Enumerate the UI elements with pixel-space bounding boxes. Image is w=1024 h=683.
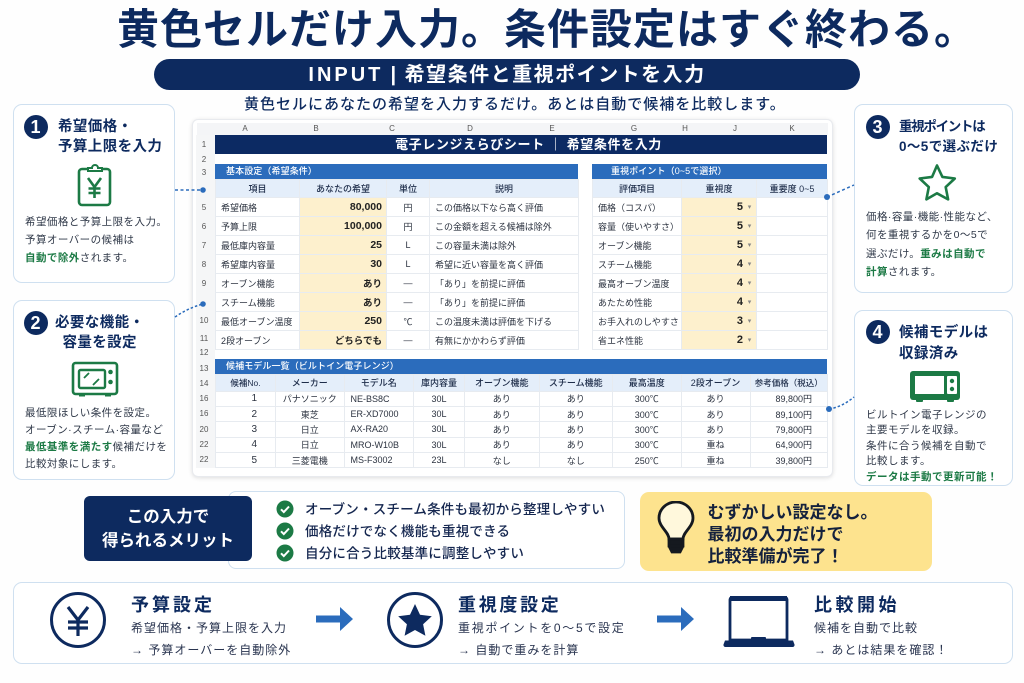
row numbers: 5 xyxy=(202,203,206,212)
row numbers: 22 xyxy=(200,440,208,449)
check list xyxy=(276,500,605,562)
table: priority points: 5 xyxy=(737,239,743,251)
table: priority points: 最高オーブン温度 xyxy=(598,278,669,288)
column letters: G xyxy=(631,124,637,133)
step 3 heading: 0〜5で選ぶだけ xyxy=(899,138,998,154)
panel: step 2 xyxy=(13,300,175,480)
step 3 heading: 重視ポイントは xyxy=(899,118,984,134)
step 1 heading xyxy=(58,118,162,154)
table: candidate models: なし xyxy=(493,456,511,466)
panel: merit list xyxy=(228,491,625,569)
flow 2 heading: 重視度設定 xyxy=(458,595,562,615)
table: basic settings: この容量未満は除外 xyxy=(435,240,516,250)
table: candidate models: 日立 xyxy=(301,440,319,450)
badge 1 xyxy=(24,114,48,138)
table: candidate models: 89,100円 xyxy=(775,410,812,420)
table: candidate models: 三菱電機 xyxy=(292,456,328,466)
table: basic settings: あなたの希望 xyxy=(316,184,370,194)
badge 2 xyxy=(24,310,48,334)
sheet title bar xyxy=(215,135,827,154)
flow 1 text: → 予算オーバーを自動除外 xyxy=(131,642,291,656)
panel: merit heading: この入力で xyxy=(127,508,209,526)
table: priority points: オーブン機能 xyxy=(598,240,651,250)
panel: step 1 xyxy=(13,104,175,283)
column letters xyxy=(197,123,828,135)
row numbers: 13 xyxy=(200,364,208,373)
step 2 text: 最低限ほしい条件を設定。 xyxy=(25,407,156,419)
callout text xyxy=(708,503,878,566)
table: priority points: ▾ xyxy=(748,261,751,268)
row numbers: 6 xyxy=(202,222,206,231)
table: basic settings: L xyxy=(405,240,410,250)
flow 1 heading: 予算設定 xyxy=(131,595,215,615)
table: basic settings: 希望庫内容量 xyxy=(221,260,275,270)
table: priority points: ▾ xyxy=(748,204,751,211)
row numbers: 8 xyxy=(202,260,206,269)
table: candidate models: 30L xyxy=(431,394,447,404)
panel: callout xyxy=(640,492,932,571)
column letters: A xyxy=(242,124,248,133)
table: priority points: 5 xyxy=(737,201,743,213)
table: candidate models: 候補No. xyxy=(230,378,261,388)
icon: microwave filled xyxy=(910,371,960,402)
table: candidate models: 300℃ xyxy=(635,394,659,404)
title: 黄色セルだけ入力。条件設定はすぐ終わる。 xyxy=(117,6,977,53)
table: candidate models: 300℃ xyxy=(635,440,659,450)
step 1 text xyxy=(25,216,167,264)
table: candidate models: MRO-W10B xyxy=(350,440,399,450)
table: priority points: 4 xyxy=(737,258,743,270)
table: candidate models: 30L xyxy=(431,424,447,434)
icon: laptop xyxy=(723,596,795,647)
badge 3: 3 xyxy=(872,116,882,136)
row numbers: 14 xyxy=(200,379,208,388)
table: candidate models: 300℃ xyxy=(635,425,659,435)
table: candidate models: あり xyxy=(493,440,511,450)
table: priority points: 5 xyxy=(737,220,743,232)
table: candidate models: 3 xyxy=(251,424,257,435)
table: priority points: ▾ xyxy=(748,223,751,230)
table: priority points: 2 xyxy=(737,334,743,346)
table: candidate models: 300℃ xyxy=(635,410,659,420)
table: priority points: 4 xyxy=(737,296,743,308)
row numbers: 3 xyxy=(202,168,206,177)
table: candidate models: 4 xyxy=(251,439,257,450)
merit text: オーブン・スチーム条件も最初から整理しやすい xyxy=(305,502,605,517)
table: candidate models: あり xyxy=(567,425,585,435)
column letters: J xyxy=(733,124,737,133)
table: basic settings: ℃ xyxy=(403,316,412,326)
step 4 heading: 候補モデルは xyxy=(899,324,988,340)
subtitle: 黄色セルにあなたの希望を入力するだけ。あとは自動で候補を比較します。 xyxy=(244,96,786,113)
flow 1 text xyxy=(131,621,291,656)
badge 3 xyxy=(866,114,890,138)
table: candidate models: 2段オーブン xyxy=(691,378,740,388)
table: priority points: ▾ xyxy=(748,242,751,249)
column letters: D xyxy=(467,124,473,133)
table: priority points: 3 xyxy=(737,315,743,327)
table: priority points: 価格（コスパ） xyxy=(598,202,661,212)
table: candidate models: 5 xyxy=(251,455,257,466)
table: candidate models: 重ね xyxy=(706,440,724,450)
table: candidate models: 参考価格（税込） xyxy=(755,378,823,388)
table: basic settings: 説明 xyxy=(495,184,513,194)
row numbers: 2 xyxy=(202,155,206,164)
step 3 text xyxy=(866,211,998,278)
callout text: 比較準備が完了！ xyxy=(708,547,844,566)
step 1 heading: 希望価格・ xyxy=(58,118,132,134)
row numbers: 16 xyxy=(200,409,208,418)
table: candidate models: 最高温度 xyxy=(629,378,665,388)
table: candidate models: 23L xyxy=(431,455,447,465)
callout text: 最初の入力だけで xyxy=(708,525,844,544)
table: basic settings: 最低オーブン温度 xyxy=(221,316,292,326)
panel: step 3 xyxy=(854,104,1013,293)
table: basic settings: オーブン機能 xyxy=(221,278,274,288)
table: basic settings: 80,000 xyxy=(350,201,382,213)
table: candidate models: あり xyxy=(706,410,724,420)
table: basic settings: 最低庫内容量 xyxy=(221,240,275,250)
flow 2 text: → 自動で重みを計算 xyxy=(458,642,579,656)
table: candidate models: 30L xyxy=(431,409,447,419)
table: priority points: 重視度 xyxy=(705,184,732,194)
table: candidate models: あり xyxy=(493,425,511,435)
step 3 text: 計算されます。 xyxy=(866,266,942,278)
table: candidate models: スチーム機能 xyxy=(549,378,603,388)
section bar: basic settings xyxy=(215,164,578,179)
step 4 text: 条件に合う候補を自動で xyxy=(866,440,987,452)
table: basic settings: 希望に近い容量を高く評価 xyxy=(435,260,543,270)
table: priority points: あたため性能 xyxy=(598,298,652,308)
merit text: 自分に合う比較基準に調整しやすい xyxy=(305,546,524,561)
table: candidate models: あり xyxy=(567,410,585,420)
step 1 heading: 予算上限を入力 xyxy=(58,138,162,154)
badge 2: 2 xyxy=(30,312,40,332)
step 2 heading xyxy=(55,314,144,350)
table: priority points: ▾ xyxy=(748,299,751,306)
panel: flow steps xyxy=(13,582,1013,664)
table: candidate models: あり xyxy=(493,410,511,420)
table: candidate models: 64,900円 xyxy=(775,440,812,450)
table: candidate models: 250℃ xyxy=(635,456,659,466)
table: candidate models: メーカー xyxy=(292,378,328,388)
table: basic settings: あり xyxy=(363,279,382,290)
row numbers: 22 xyxy=(200,455,208,464)
table: priority points: お手入れのしやすさ xyxy=(598,316,679,326)
table: candidate models: オーブン機能 xyxy=(475,378,528,388)
table: priority points: ▾ xyxy=(748,318,751,325)
step 4 heading xyxy=(899,324,988,362)
icon: check 3 xyxy=(276,544,294,562)
table: candidate models: 89,800円 xyxy=(775,394,812,404)
step 2 text xyxy=(25,407,167,470)
table: candidate models: パナソニック xyxy=(283,394,337,404)
merit text xyxy=(305,502,605,561)
table: basic settings: どちらでも xyxy=(335,336,382,347)
step 2 text: オーブン·スチーム·容量など xyxy=(25,424,163,436)
row numbers: 9 xyxy=(202,279,206,288)
section bar: basic settings: 基本設定（希望条件） xyxy=(226,166,317,176)
table: basic settings: L xyxy=(405,259,410,269)
table: candidate models: 重ね xyxy=(706,456,724,466)
row numbers: 11 xyxy=(200,334,208,343)
table: candidate models: 日立 xyxy=(301,425,319,435)
panel: step 4 xyxy=(854,310,1013,486)
table: candidate models: AX-RA20 xyxy=(350,424,388,434)
flow 1 text: 希望価格・予算上限を入力 xyxy=(131,621,287,635)
table: priority points: 省エネ性能 xyxy=(598,336,643,346)
section bar: candidate models xyxy=(215,359,827,374)
table: candidate models: あり xyxy=(706,425,724,435)
icon: yen clipboard xyxy=(78,164,112,206)
badge 1: 1 xyxy=(30,116,40,136)
panel: merit heading: 得られるメリット xyxy=(102,532,234,550)
panel: spreadsheet xyxy=(192,119,833,477)
table: candidate models: 30L xyxy=(431,440,447,450)
step 3 heading xyxy=(899,118,998,154)
column letters: H xyxy=(682,124,688,133)
table: priority points xyxy=(592,179,828,350)
step 1 text: 予算オーバーの候補は xyxy=(25,234,134,246)
table: priority points: 重要度 0~5 xyxy=(770,184,814,194)
table: candidate models: MS-F3002 xyxy=(350,455,393,465)
merit text: 価格だけでなく機能も重視できる xyxy=(305,524,510,539)
banner: INPUT: INPUT | 希望条件と重視ポイントを入力 xyxy=(308,64,706,86)
icon: yen circle xyxy=(50,592,106,648)
icon: star outline xyxy=(918,164,956,201)
table: candidate models xyxy=(215,374,828,468)
table: basic settings: 円 xyxy=(403,222,412,232)
table: basic settings: 30 xyxy=(370,258,382,270)
table: candidate models: ER-XD7000 xyxy=(350,409,399,419)
step 2 text: 最低基準を満たす候補だけを xyxy=(25,441,167,453)
badge 4: 4 xyxy=(872,322,882,342)
table: candidate models: 2 xyxy=(251,409,257,420)
flow 2 text: 重視ポイントを0〜5で設定 xyxy=(458,621,625,635)
row numbers: 1 xyxy=(202,140,206,149)
table: candidate models: なし xyxy=(567,456,585,466)
table: candidate models: 1 xyxy=(251,393,257,404)
table: priority points: 4 xyxy=(737,277,743,289)
table: basic settings: 250 xyxy=(364,315,382,327)
sheet title bar: 電子レンジえらびシート ｜ 希望条件を入力 xyxy=(395,137,662,152)
table: priority points: スチーム機能 xyxy=(598,260,652,270)
table: candidate models: 79,800円 xyxy=(775,425,812,435)
table: basic settings: 円 xyxy=(403,202,412,212)
badge 4 xyxy=(866,320,890,344)
icon: light bulb xyxy=(658,501,694,554)
table: basic settings: — xyxy=(404,297,412,307)
flow 3 text xyxy=(814,621,948,656)
table: basic settings: この温度未満は評価を下げる xyxy=(435,316,552,326)
table: candidate models: 東芝 xyxy=(301,410,319,420)
table: basic settings: あり xyxy=(363,298,382,309)
column letters: K xyxy=(789,124,795,133)
table: basic settings: スチーム機能 xyxy=(221,298,275,308)
step 4 text: データは手動で更新可能！ xyxy=(866,471,998,483)
step 2 heading: 必要な機能・ xyxy=(55,314,144,330)
table: basic settings: 2段オーブン xyxy=(221,336,270,346)
banner: INPUT xyxy=(154,59,860,90)
section bar: candidate models: 候補モデル一覧（ビルトイン電子レンジ） xyxy=(226,361,399,371)
callout text: むずかしい設定なし。 xyxy=(708,503,878,522)
table: basic settings: 「あり」を前提に評価 xyxy=(435,278,525,288)
step 2 text: 比較対象にします。 xyxy=(25,458,122,470)
table: candidate models: モデル名 xyxy=(361,378,397,388)
step 3 text: 選ぶだけ。重みは自動で xyxy=(866,248,986,260)
flow 3 text: → あとは結果を確認！ xyxy=(814,642,948,656)
table: basic settings: この価格以下なら高く評価 xyxy=(435,202,543,212)
table: basic settings: 希望価格 xyxy=(221,202,257,212)
table: basic settings: 100,000 xyxy=(344,220,382,232)
step 4 text: 比較します。 xyxy=(866,455,931,467)
step 1 text: 希望価格と予算上限を入力。 xyxy=(25,216,167,228)
column letters: C xyxy=(389,124,395,133)
icon: microwave outline xyxy=(72,362,118,396)
table: basic settings: 有無にかかわらず評価 xyxy=(435,336,525,346)
table: priority points: 評価項目 xyxy=(619,184,655,194)
table: basic settings: 項目 xyxy=(248,184,266,194)
column letters: B xyxy=(313,124,319,133)
step 4 text: 主要モデルを収録。 xyxy=(866,424,965,436)
table: basic settings: — xyxy=(404,278,412,288)
row numbers xyxy=(196,135,215,468)
step 4 text xyxy=(866,408,998,483)
table: candidate models: 39,800円 xyxy=(775,456,812,466)
table: basic settings: 予算上限 xyxy=(221,222,257,232)
step 2 heading: 容量を設定 xyxy=(62,334,137,350)
icon: check 2 xyxy=(276,522,294,540)
row numbers: 7 xyxy=(202,241,206,250)
column letters: E xyxy=(549,124,555,133)
table: priority points: ▾ xyxy=(748,337,751,344)
table: basic settings: 25 xyxy=(370,239,382,251)
section bar: priority points: 重視ポイント（0~5で選択） xyxy=(611,166,727,176)
flow 3 heading: 比較開始 xyxy=(814,595,900,615)
table: basic settings: — xyxy=(404,335,412,345)
table: candidate models: あり xyxy=(567,440,585,450)
table: candidate models: あり xyxy=(567,394,585,404)
step 4 text: ビルトイン電子レンジの xyxy=(866,408,987,420)
icon: star circle xyxy=(387,592,443,648)
row numbers: 20 xyxy=(200,425,208,434)
table: priority points: ▾ xyxy=(748,280,751,287)
table: candidate models: あり xyxy=(706,394,724,404)
table: candidate models: 庫内容量 xyxy=(421,378,457,388)
table: candidate models: あり xyxy=(493,394,511,404)
row numbers: 16 xyxy=(200,394,208,403)
section bar: priority points xyxy=(592,164,827,179)
row numbers: 12 xyxy=(200,348,208,357)
table: candidate models: NE-BS8C xyxy=(350,394,390,404)
table: basic settings: この金額を超える候補は除外 xyxy=(435,222,552,232)
table: priority points: 容量（使いやすさ） xyxy=(598,222,679,232)
panel: merit heading xyxy=(84,496,252,561)
step 3 text: 何を重視するかを0〜5で xyxy=(866,229,988,241)
arrow 1 xyxy=(316,607,353,631)
table: basic settings xyxy=(215,179,579,350)
flow 3 text: 候補を自動で比較 xyxy=(814,621,918,635)
step 1 text: 自動で除外されます。 xyxy=(25,252,133,264)
step 4 heading: 収録済み xyxy=(899,346,959,362)
arrow 2 xyxy=(657,607,694,631)
step 3 text: 価格·容量·機能·性能など、 xyxy=(866,211,998,223)
icon: check 1 xyxy=(276,500,294,518)
flow 2 text xyxy=(458,621,625,656)
row numbers: 10 xyxy=(200,316,208,325)
table: basic settings: 単位 xyxy=(399,184,417,194)
table: basic settings: 「あり」を前提に評価 xyxy=(435,298,525,308)
